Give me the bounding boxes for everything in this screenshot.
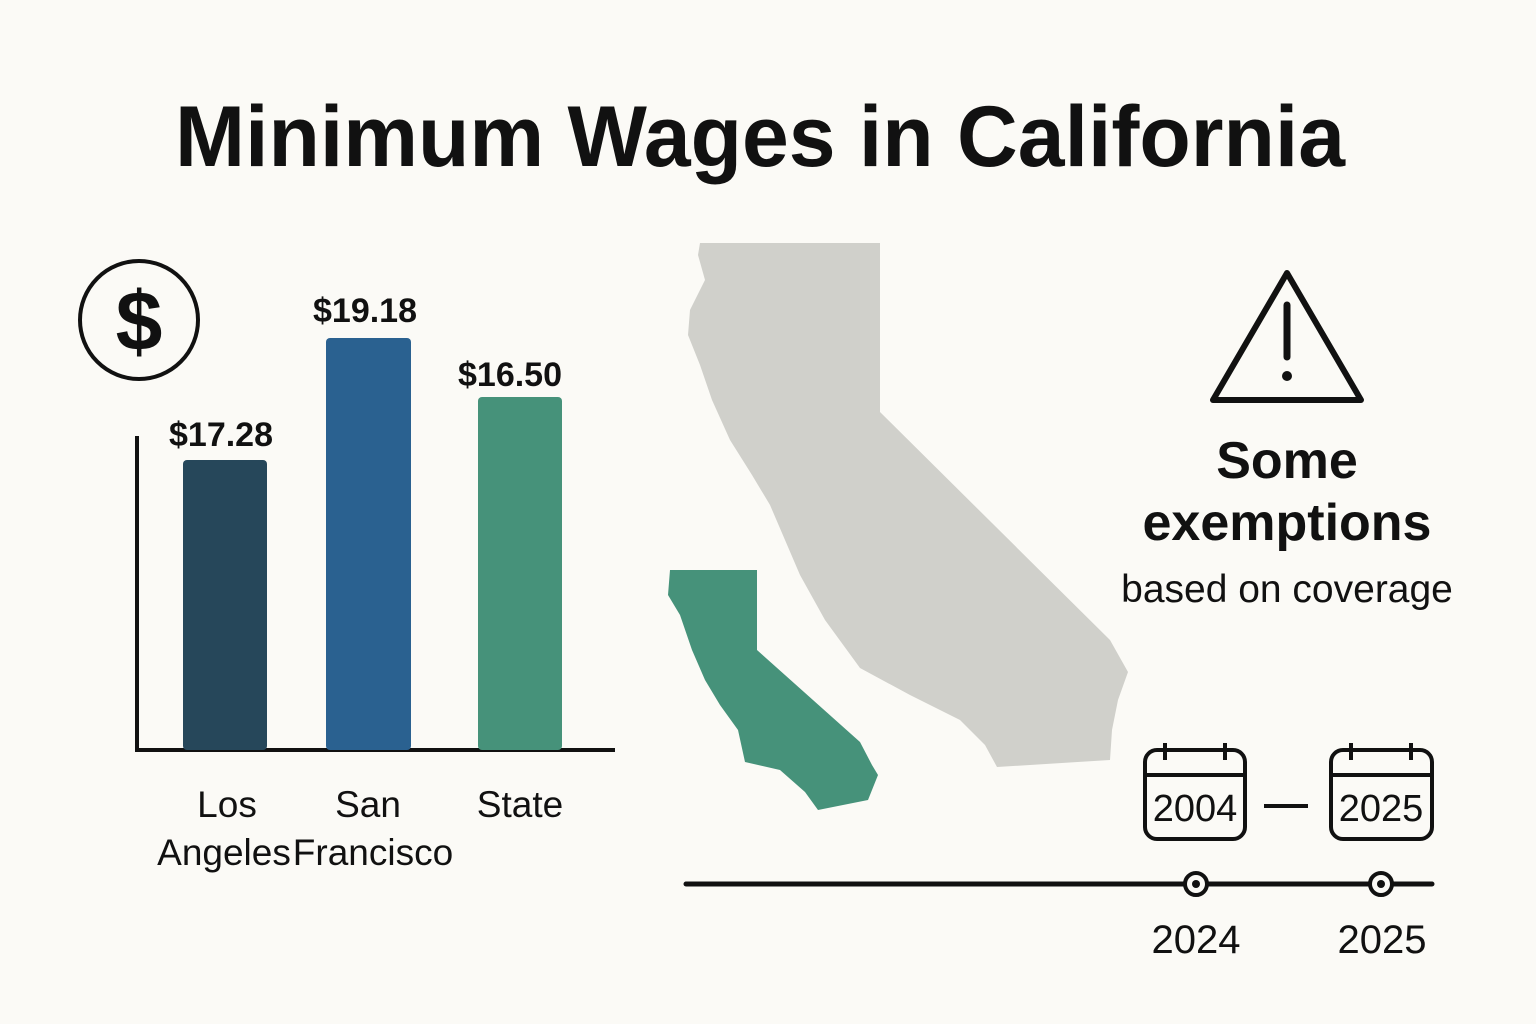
timeline	[686, 873, 1432, 962]
arrow: dash between years	[1264, 804, 1308, 808]
icon: dollar circle	[80, 261, 198, 379]
category labels: Los	[197, 784, 257, 825]
icon: calendar 2025: 2025	[1339, 788, 1423, 830]
value labels: $16.50	[458, 356, 562, 394]
category labels: Francisco	[293, 832, 453, 873]
icon: dollar circle: $	[116, 274, 162, 368]
icon: calendar 2025	[1331, 743, 1432, 839]
category labels: Angeles	[157, 832, 291, 873]
bar: San Francisco	[326, 338, 411, 750]
map: small California (green)	[668, 570, 878, 810]
icon: calendar 2004	[1145, 743, 1245, 839]
text: exemptions: Some	[1216, 432, 1358, 490]
text: exemptions: exemptions	[1143, 494, 1431, 552]
value labels	[169, 292, 562, 454]
text: exemptions: based on coverage	[1121, 568, 1453, 611]
bar chart	[137, 292, 615, 873]
icon: calendar 2004: 2004	[1153, 788, 1237, 830]
category labels: State	[477, 784, 563, 825]
text: exemptions	[1121, 432, 1453, 611]
category labels: San	[335, 784, 401, 825]
timeline: 2025	[1338, 918, 1426, 962]
icon: warning triangle	[1213, 273, 1361, 400]
title: Minimum Wages in California	[175, 89, 1346, 185]
category labels	[157, 784, 563, 873]
map: large California (gray)	[688, 243, 1128, 767]
bar: Los Angeles	[183, 460, 267, 750]
bar: State	[478, 397, 562, 750]
value labels: $19.18	[313, 292, 417, 330]
chart axes	[137, 436, 615, 750]
timeline: 2024	[1152, 918, 1240, 962]
value labels: $17.28	[169, 416, 273, 454]
